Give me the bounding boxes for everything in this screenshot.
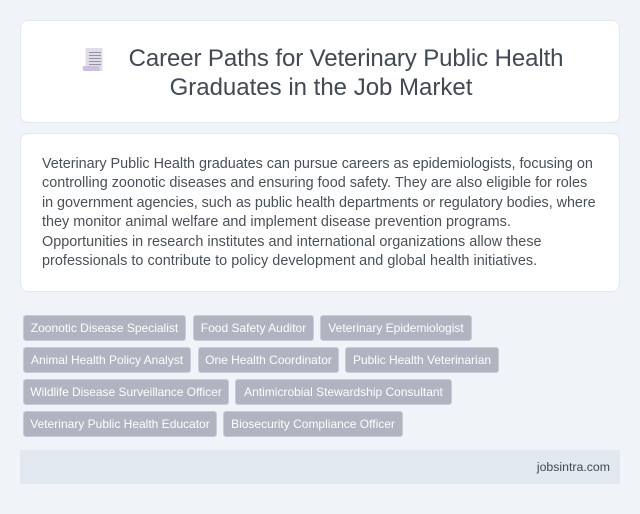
tag xyxy=(193,315,314,341)
tag list xyxy=(23,315,499,437)
tag: One Health Coordinator xyxy=(205,353,332,367)
summary text: they monitor animal welfare and implement disease prevention programs. xyxy=(42,214,511,230)
summary text: in government agencies, such as public health departments or regulatory bodies, where xyxy=(42,195,596,211)
footer bar xyxy=(20,450,620,484)
tag xyxy=(320,315,472,341)
tag: Veterinary Public Health Educator xyxy=(30,417,210,431)
tag: Animal Health Policy Analyst xyxy=(31,353,183,367)
tag xyxy=(23,315,186,341)
title xyxy=(129,45,563,101)
summary text: professionals to contribute to policy development and global health initiatives. xyxy=(42,253,537,269)
title: Career Paths for Veterinary Public Health xyxy=(129,45,563,72)
tag xyxy=(345,347,499,373)
tag: Antimicrobial Stewardship Consultant xyxy=(244,385,443,399)
tag: Wildlife Disease Surveillance Officer xyxy=(30,385,222,399)
tag: Biosecurity Compliance Officer xyxy=(231,417,395,431)
tag xyxy=(198,347,339,373)
tag xyxy=(23,411,217,437)
icon: document scroll xyxy=(82,48,102,71)
tag: Public Health Veterinarian xyxy=(353,353,491,367)
summary text: Opportunities in research institutes and international organizations allow these xyxy=(42,234,542,250)
footer source: jobsintra.com xyxy=(537,460,610,474)
tag xyxy=(23,347,191,373)
summary text xyxy=(42,156,596,269)
tag xyxy=(223,411,403,437)
tag: Veterinary Epidemiologist xyxy=(328,321,464,335)
header panel xyxy=(20,20,620,123)
summary text: Veterinary Public Health graduates can pursue careers as epidemiologists, focusing on xyxy=(42,156,593,172)
tag xyxy=(23,379,229,405)
title: Graduates in the Job Market xyxy=(170,74,472,101)
tag xyxy=(235,379,452,405)
summary panel xyxy=(20,133,620,292)
summary text: controlling zoonotic diseases and ensuring food safety. They are also eligible for roles xyxy=(42,175,587,191)
tag: Food Safety Auditor xyxy=(201,321,306,335)
tag: Zoonotic Disease Specialist xyxy=(31,321,178,335)
